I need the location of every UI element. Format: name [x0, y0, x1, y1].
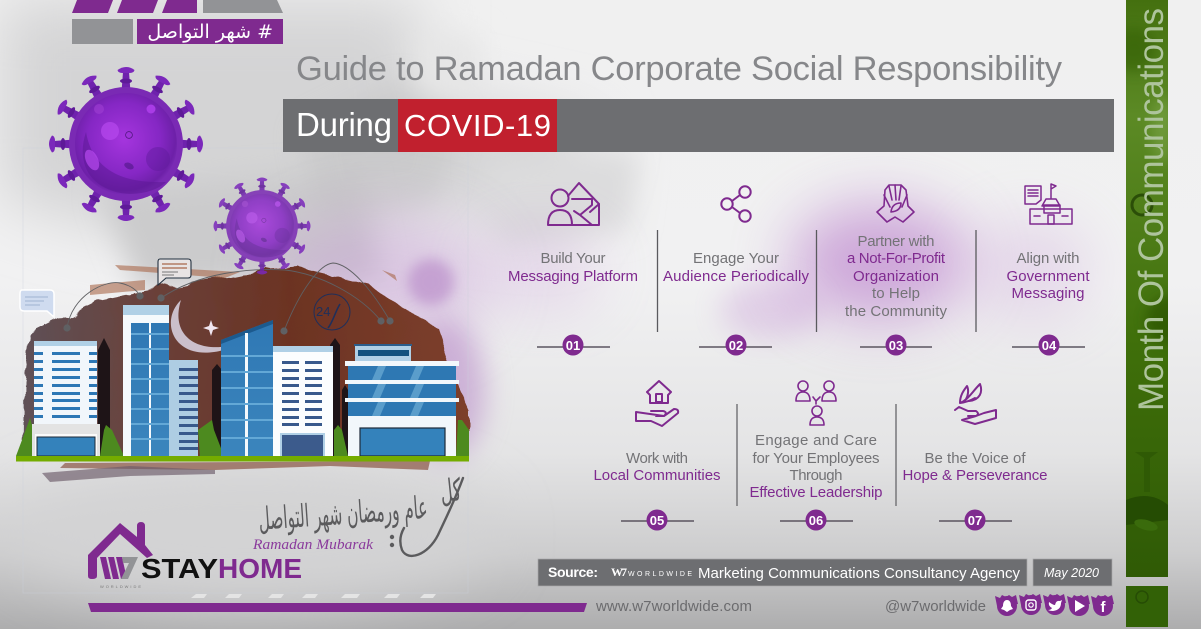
- trees: [16, 418, 469, 456]
- top left tabs: [72, 0, 283, 44]
- step 04: [1006, 184, 1090, 356]
- source bar: Marketing Communications Consultancy Agency: [698, 565, 1020, 582]
- step 03: [845, 185, 948, 356]
- arabic calligraphy: عام ورمضان شهر التواصل: [257, 489, 429, 537]
- icon: person and envelope: [548, 183, 599, 225]
- step 02: [663, 186, 810, 356]
- step 04: Align with: [1016, 250, 1080, 267]
- large virus: [49, 67, 203, 221]
- building 1: [32, 341, 100, 456]
- ground: [16, 456, 469, 462]
- date box: May 2020: [1044, 566, 1099, 580]
- source bar: Source:: [548, 564, 598, 580]
- 24 hour phone: [314, 294, 350, 330]
- step 03: a Not-For-Profit: [847, 250, 946, 267]
- star: [203, 320, 219, 336]
- icon: share: [721, 186, 751, 222]
- arabic calligraphy: [257, 472, 463, 556]
- step 07: Hope & Perseverance: [902, 467, 1048, 484]
- building 3: [169, 360, 198, 456]
- step 03: the Community: [845, 303, 948, 320]
- city illustration: [16, 259, 469, 482]
- ramadan mubarak: Ramadan Mubarak: [252, 537, 373, 553]
- step 04: Government: [1006, 268, 1090, 285]
- step 02: Audience Periodically: [663, 268, 810, 285]
- icon: house on hand: [636, 381, 678, 426]
- building 5: [273, 346, 333, 456]
- right green stripe: Month Of Communications: [1132, 8, 1171, 411]
- crescent: [171, 300, 228, 353]
- building 4: [221, 320, 273, 456]
- chat bubble left: [20, 290, 54, 317]
- source bar: W7: [611, 565, 627, 579]
- stay home logo: STAY: [141, 553, 218, 584]
- title band: [283, 99, 1114, 152]
- step 05: 05: [650, 513, 664, 528]
- chat bubble top: [158, 259, 191, 285]
- title band: COVID-19: [404, 108, 551, 143]
- step 07: Be the Voice of: [924, 450, 1026, 467]
- social icons: [995, 594, 1114, 616]
- step 05: [594, 381, 720, 530]
- step 02: Engage Your: [693, 250, 779, 267]
- icon: document and government building: [1025, 184, 1072, 224]
- step 04: 04: [1042, 338, 1057, 353]
- minarets: [98, 338, 348, 456]
- social handle: @w7worldwide: [885, 598, 986, 615]
- right green stripe: [1126, 0, 1168, 627]
- step 03: Partner with: [858, 233, 934, 250]
- step 06: [750, 381, 882, 530]
- website: www.w7worldwide.com: [595, 598, 752, 615]
- stay home logo: [88, 522, 302, 589]
- date box: [1033, 559, 1112, 586]
- step 06: for Your Employees: [752, 450, 880, 467]
- step 06: Effective Leadership: [750, 484, 882, 501]
- brown watercolor: [23, 268, 468, 456]
- 24 hour phone: 24: [316, 304, 330, 319]
- step 07: 07: [968, 513, 982, 528]
- step 02: 02: [729, 338, 743, 353]
- stay home logo: WORLDWIDE: [100, 584, 141, 589]
- title band: During: [296, 106, 392, 143]
- step 04: Messaging: [1012, 285, 1084, 302]
- brush strokes under ground: [60, 461, 430, 470]
- purple footer bar: [88, 603, 587, 612]
- step 03: Organization: [853, 268, 939, 285]
- building 6: [345, 344, 459, 456]
- title: Guide to Ramadan Corporate Social Responsibility: [296, 50, 1063, 88]
- source bar: [538, 559, 1027, 586]
- step 06: Through: [790, 467, 842, 484]
- stay home logo: HOME: [218, 553, 302, 584]
- step 03: to Help: [872, 285, 920, 302]
- connector arcs: [67, 263, 390, 331]
- step 01: Build Your: [540, 250, 606, 267]
- step 01: 01: [566, 338, 580, 353]
- step 03: 03: [889, 338, 903, 353]
- top left tabs: # شهر التواصل: [147, 21, 273, 43]
- icon: three people connected: [796, 381, 836, 425]
- source bar: WORLDWIDE: [628, 571, 692, 578]
- building 2: [123, 305, 169, 456]
- icon: joined hands with leaf: [877, 185, 914, 222]
- step 06: Engage and Care: [755, 432, 877, 449]
- social icons: f: [1100, 599, 1106, 616]
- small virus: [213, 177, 311, 275]
- step 05: Local Communities: [594, 467, 720, 484]
- step 01: [508, 183, 638, 356]
- step 06: 06: [809, 513, 823, 528]
- step 01: Messaging Platform: [508, 268, 638, 285]
- step 05: Work with: [626, 450, 688, 467]
- arabic calligraphy: كل: [438, 472, 463, 510]
- icon: plant on hand: [955, 384, 996, 424]
- step 07: [902, 384, 1048, 530]
